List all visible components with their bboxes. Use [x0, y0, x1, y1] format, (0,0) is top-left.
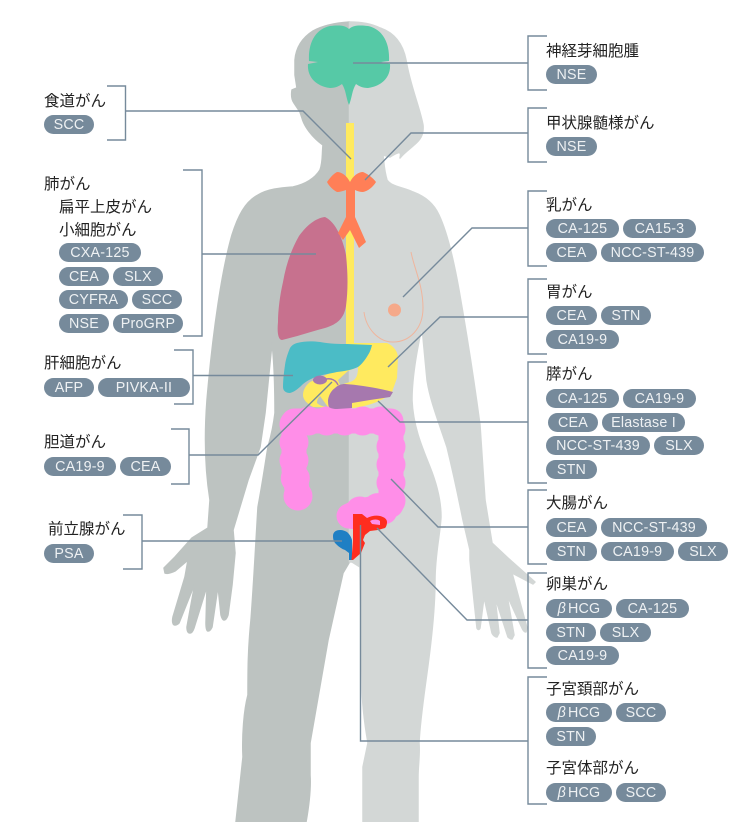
callout: 膵がん: CA-125 [558, 391, 607, 407]
callout: 肺がん: 小細胞がん [59, 222, 137, 239]
callout: 胆道がん: CA19-9 [55, 459, 105, 475]
bracket: 肝細胞がん [174, 350, 293, 404]
organ: lung [278, 217, 348, 340]
callout: 神経芽細胞腫: 神経芽細胞腫 [546, 43, 639, 60]
bracket: 食道がん [107, 86, 351, 159]
callout: 膵がん: STN [557, 462, 586, 478]
callout: 子宮頚部がん: 子宮頚部がん [546, 681, 639, 698]
callout: 肝細胞がん: AFP [55, 380, 83, 396]
organ: gallbladder [313, 376, 327, 384]
callout: 肺がん: 肺がん [44, 176, 91, 193]
callout: 甲状腺髄様がん [546, 114, 655, 156]
left half of body [164, 22, 350, 822]
bracket: 神経芽細胞腫 [353, 36, 547, 90]
bracket: 胆道がん [171, 382, 332, 484]
callout: 胃がん: 胃がん [546, 284, 593, 301]
callout: 前立腺がん [44, 520, 126, 563]
callout: 肺がん: CEA [69, 269, 99, 285]
bracket: 膵がん [378, 362, 547, 483]
bracket: 肺がん [183, 170, 316, 336]
right half of body [350, 22, 535, 822]
callout: 卵巣がん: βHCG [558, 601, 600, 617]
callout: 大腸がん: STN [557, 544, 586, 560]
callout: 胃がん: STN [611, 308, 641, 324]
callout: 子宮体部がん [546, 760, 666, 802]
callout: 卵巣がん: 卵巣がん [546, 576, 608, 593]
callout: 大腸がん: 大腸がん [546, 495, 608, 512]
body silhouette [164, 22, 535, 822]
organ: pancreas [328, 384, 393, 409]
callout: 乳がん: 乳がん [546, 197, 593, 214]
callout: 膵がん: SLX [665, 438, 693, 454]
callout: 膵がん: NCC-ST-439 [556, 438, 640, 454]
callout: 子宮体部がん: βHCG [558, 785, 600, 801]
callout: 肺がん: 扁平上皮がん [59, 199, 152, 216]
callout: 大腸がん: CEA [556, 520, 586, 536]
callout: 肺がん: CYFRA [69, 292, 118, 308]
organ: liver [283, 341, 372, 393]
callout: 胆道がん: CEA [130, 459, 160, 475]
callout: 乳がん: CA15-3 [635, 221, 684, 237]
bracket: 乳がん [403, 191, 547, 297]
callout: 乳がん: CA-125 [558, 221, 607, 237]
callout: 膵がん: CEA [558, 415, 588, 431]
callout: 神経芽細胞腫 [546, 42, 639, 84]
callout: 膵がん: Elastase I [611, 415, 676, 431]
callout: 肺がん: NSE [69, 316, 99, 332]
callout: 肝細胞がん [44, 354, 190, 397]
callout: 膵がん: 膵がん [546, 366, 593, 383]
callout: 大腸がん: NCC-ST-439 [612, 520, 696, 536]
callout: 胃がん: CEA [556, 308, 586, 324]
callout: 食道がん [44, 92, 106, 134]
callout: 子宮体部がん: SCC [626, 785, 656, 801]
organ: uterus and ovaries [352, 514, 387, 560]
callout: 肺がん: SCC [142, 292, 172, 308]
callout: 子宮頚部がん: SCC [626, 705, 656, 721]
callout: 大腸がん: SLX [689, 544, 717, 560]
bracket: 子宮がん [360, 525, 547, 804]
bracket: 甲状腺髄様がん [365, 108, 547, 180]
callout: 甲状腺髄様がん: NSE [556, 139, 586, 155]
callout: 肺がん [44, 176, 183, 333]
bracket: 大腸がん [391, 479, 547, 564]
callout: 卵巣がん: CA19-9 [558, 648, 607, 664]
callout: 大腸がん [546, 494, 728, 561]
callout: 子宮体部がん: 子宮体部がん [546, 760, 639, 777]
callout: 卵巣がん: CA-125 [628, 601, 677, 617]
callout: 食道がん: SCC [54, 117, 84, 133]
callout: 膵がん: CA19-9 [635, 391, 684, 407]
organ: colon [294, 421, 391, 517]
callout: 卵巣がん: SLX [612, 625, 639, 641]
organ: prostate [333, 530, 352, 560]
callout: 胆道がん: 胆道がん [44, 434, 106, 451]
organ: esophagus and stomach [303, 123, 398, 408]
organ: breast nipple [388, 304, 401, 316]
callout: 前立腺がん: 前立腺がん [48, 521, 126, 538]
callout: 子宮頚部がん: βHCG [558, 705, 600, 721]
organ: thyroid and trachea [327, 172, 376, 248]
callout: 胃がん: CA19-9 [558, 332, 607, 348]
callout: 卵巣がん: STN [556, 625, 586, 641]
callout: 神経芽細胞腫: NSE [556, 67, 586, 83]
bracket: 卵巣がん [377, 528, 547, 668]
callout: 乳がん [546, 196, 704, 262]
callout: 胆道がん [44, 434, 171, 476]
organ: breast outline [364, 252, 423, 342]
organ: bile duct [326, 379, 338, 385]
callout: 子宮頚部がん: STN [556, 729, 586, 745]
callout: 食道がん: 食道がん [44, 93, 106, 110]
callout: 肺がん: SLX [124, 269, 152, 285]
callout: 乳がん: CEA [556, 245, 586, 261]
callout: 乳がん: NCC-ST-439 [611, 245, 694, 261]
callout: 大腸がん: CA19-9 [613, 544, 662, 560]
callout: 甲状腺髄様がん: 甲状腺髄様がん [546, 115, 655, 132]
callout: 胃がん [546, 284, 651, 349]
callout: 膵がん [546, 366, 704, 479]
callout: 子宮頚部がん [546, 680, 666, 746]
callout: 前立腺がん: PSA [54, 546, 84, 562]
callout: 肺がん: ProGRP [121, 316, 175, 332]
bracket: 胃がん [388, 279, 547, 367]
bracket: 前立腺がん [123, 515, 342, 569]
callout: 肺がん: CXA-125 [70, 245, 130, 261]
leader lines and brackets [107, 36, 547, 804]
callout: 肝細胞がん: PIVKA-II [116, 380, 172, 396]
callout: 卵巣がん [546, 576, 689, 665]
organ: brain [308, 25, 390, 105]
callout: 肝細胞がん: 肝細胞がん [44, 355, 122, 372]
